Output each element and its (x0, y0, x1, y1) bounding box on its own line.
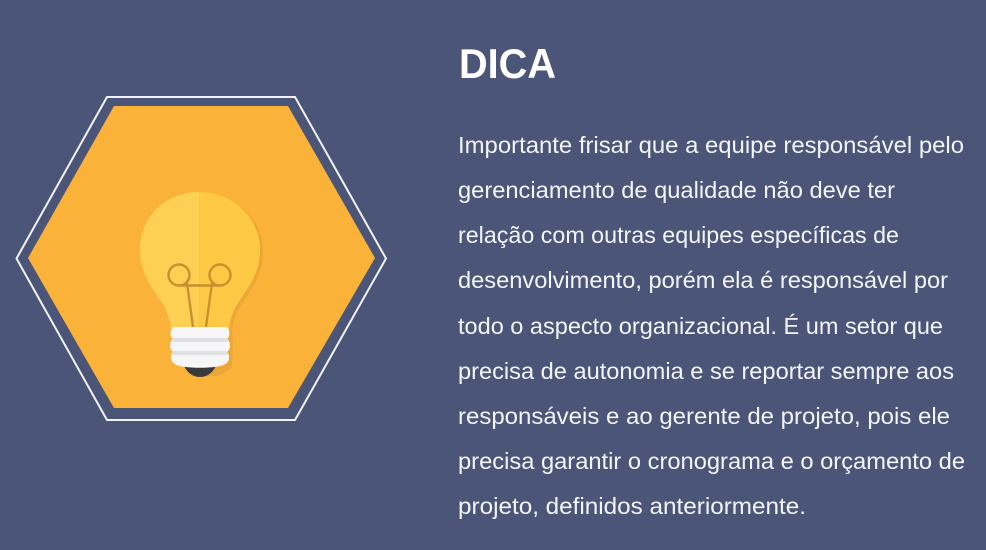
bulb glass left (140, 192, 199, 329)
body text: projeto, definidos anteriormente. (458, 493, 806, 519)
title: DICA (459, 40, 556, 87)
hexagon outline (16, 97, 386, 420)
bulb shadow (200, 193, 263, 376)
body text: responsáveis e ao gerente de projeto, pois ele (458, 403, 950, 429)
body text: gerenciamento de qualidade não deve ter (458, 177, 895, 203)
bulb screw base tip (184, 366, 216, 377)
body text: todo o aspecto organizacional. É um setor que (458, 313, 943, 339)
icon: light bulb (140, 192, 263, 377)
bulb base shading (172, 338, 228, 355)
hexagon fill (28, 106, 375, 408)
body text: Importante frisar que a equipe responsável pelo (458, 132, 964, 158)
bulb screw base (170, 327, 230, 368)
body text: precisa garantir o cronograma e o orçamento de (458, 448, 965, 474)
body text (458, 132, 965, 519)
body text: relação com outras equipes específicas de (458, 222, 899, 248)
icon: hexagon light bulb badge (16, 97, 386, 420)
body text: desenvolvimento, porém ela é responsável por (458, 267, 948, 293)
bulb glass right (199, 192, 260, 329)
filament (168, 264, 230, 327)
body text: precisa de autonomia e se reportar sempre aos (458, 358, 954, 384)
